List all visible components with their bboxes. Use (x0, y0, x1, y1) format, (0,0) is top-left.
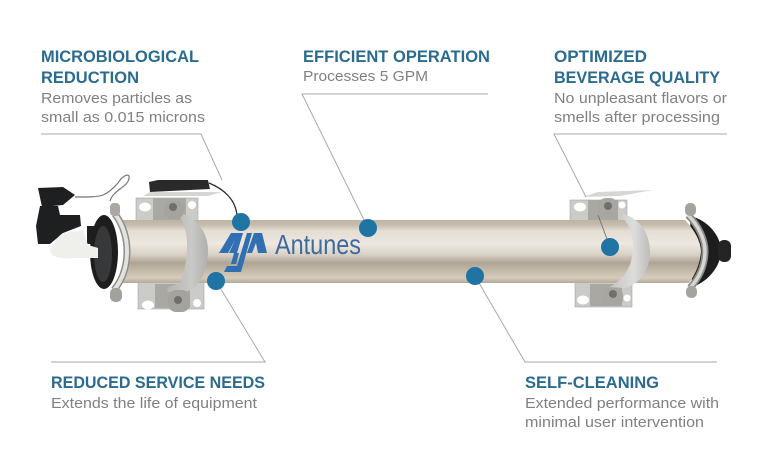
plate centre shading (153, 198, 622, 308)
valve body (36, 187, 98, 244)
callout: optimized beverage quality: OPTIMIZED (554, 47, 647, 66)
callout: self-cleaning: minimal user intervention (525, 414, 704, 431)
right strap (610, 214, 650, 288)
callout: optimized beverage quality: smells after processing (554, 109, 720, 126)
callout: self-cleaning: Extended performance with (525, 395, 719, 412)
callout: self-cleaning: SELF-CLEANING (525, 373, 659, 392)
callout: efficient operation: EFFICIENT OPERATION (303, 47, 490, 66)
filter device photo (36, 175, 731, 312)
callout: self-cleaning (466, 267, 719, 431)
callout: microbiological reduction: MICROBIOLOGICAL (41, 47, 199, 66)
tube (122, 220, 701, 283)
logo mark (219, 233, 267, 272)
logo: Antunes (219, 229, 361, 272)
left ring clamp (114, 214, 127, 290)
callout: optimized beverage quality: No unpleasant flavors or (554, 90, 727, 107)
left end cap (90, 215, 118, 289)
callout: reduced service needs (51, 272, 265, 412)
callout: microbiological reduction: REDUCTION (41, 68, 139, 87)
callout: efficient operation (302, 47, 490, 237)
callout: efficient operation: Processes 5 GPM (303, 68, 428, 85)
callout: reduced service needs: REDUCED SERVICE NEEDS (51, 373, 265, 392)
cable from valve (75, 175, 129, 201)
left strap (167, 212, 208, 292)
white connector (50, 230, 98, 258)
right end cap (690, 216, 721, 287)
callout: microbiological reduction: small as 0.015 microns (41, 109, 205, 126)
callout: reduced service needs: Extends the life of equipment (51, 395, 258, 412)
callout: microbiological reduction: Removes particles as (41, 90, 192, 107)
right shelf (583, 190, 653, 197)
sensor and shelf (143, 192, 222, 196)
callout: microbiological reduction (41, 47, 250, 231)
callout: optimized beverage quality (554, 47, 727, 256)
right ring clamp (688, 215, 705, 288)
logo text: Antunes (275, 229, 361, 260)
callout: optimized beverage quality: BEVERAGE QUALITY (554, 68, 721, 87)
mounting plates (136, 198, 632, 309)
